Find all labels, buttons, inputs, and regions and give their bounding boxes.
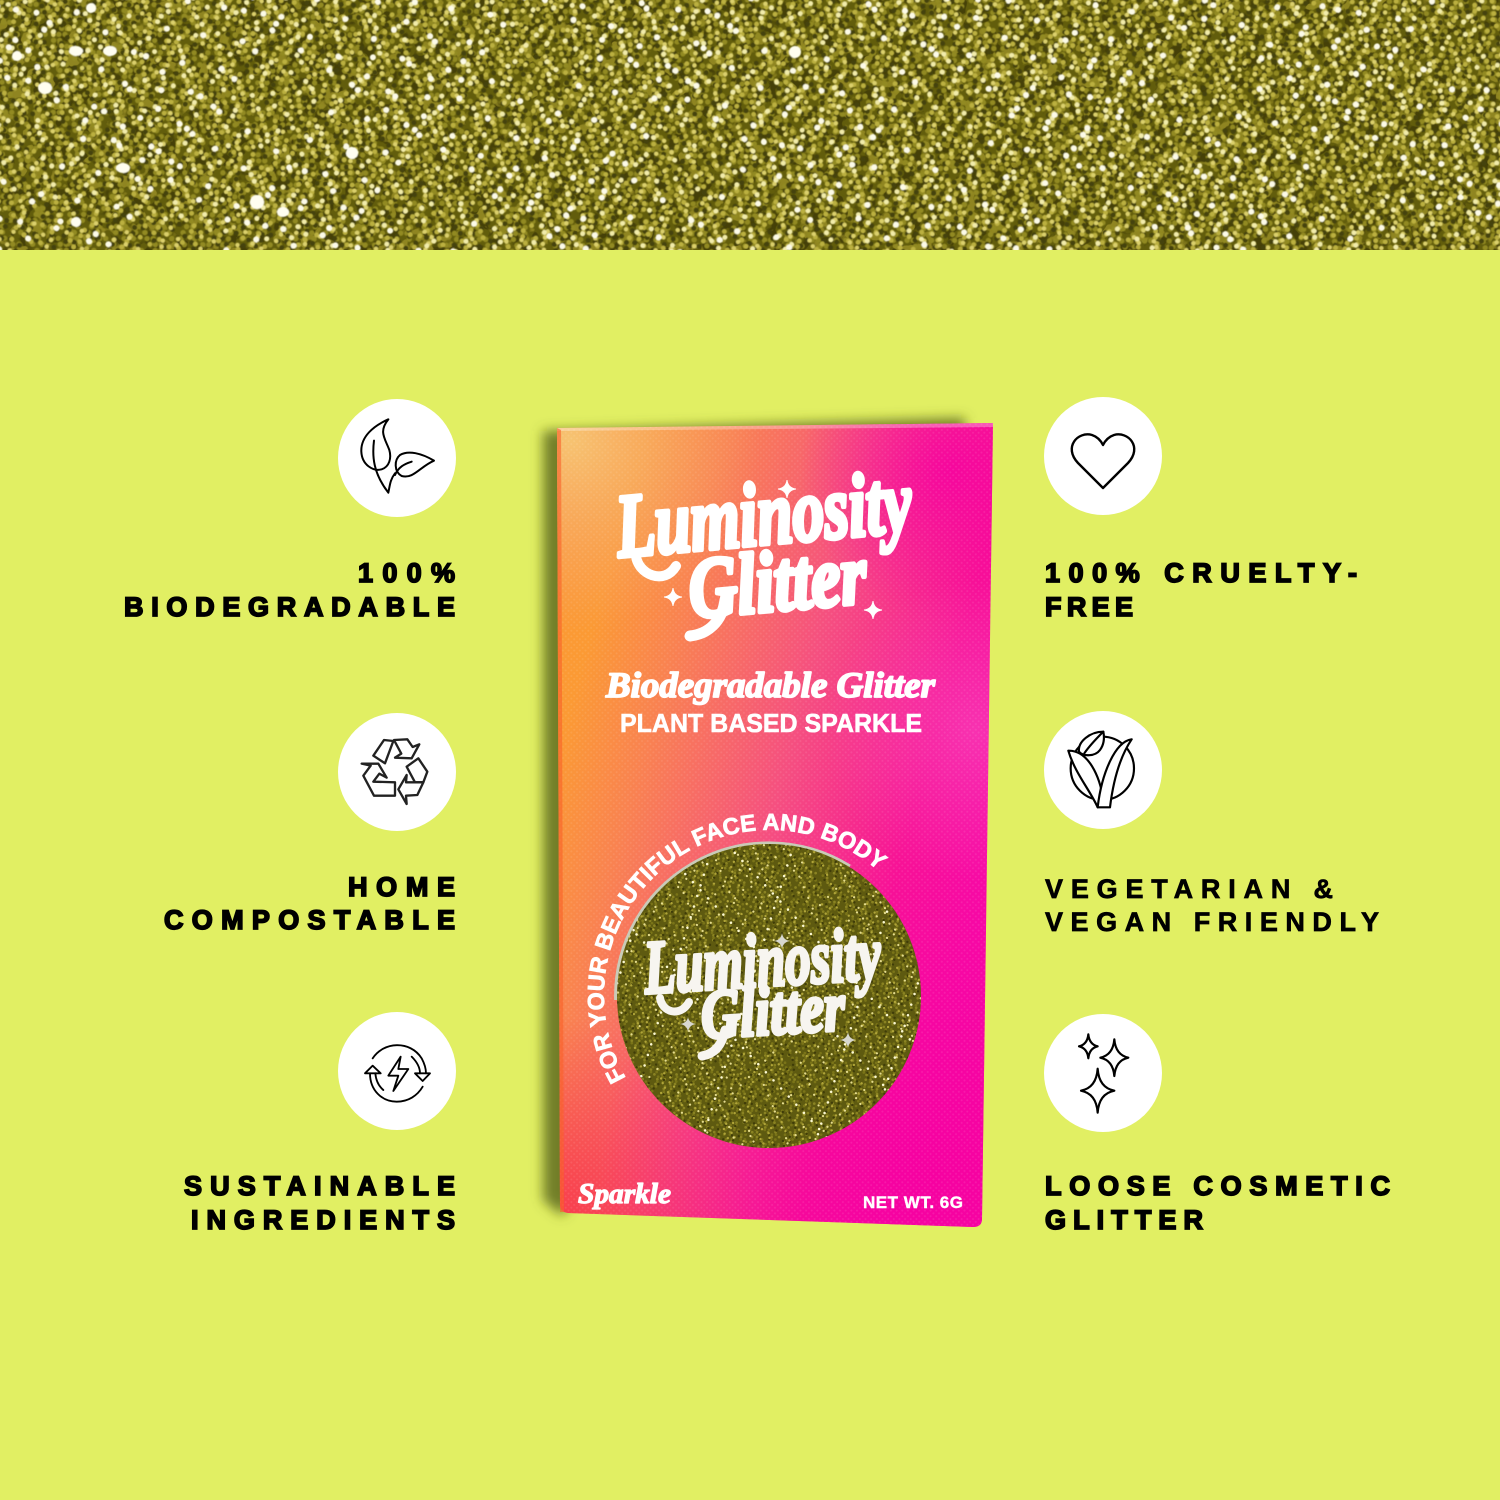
glitter window <box>614 841 921 1148</box>
box logo: Glitter <box>685 525 871 637</box>
sparkle shade name: Sparkle <box>578 1179 671 1210</box>
feature: sustainable ingredients <box>184 1012 456 1235</box>
label: cruelty free: FREE <box>1045 592 1133 622</box>
icon: sparkles <box>1044 1014 1162 1132</box>
label: home compostable: HOME <box>348 872 455 902</box>
label: loose cosmetic glitter <box>1045 1171 1390 1235</box>
label: 100% biodegradable <box>124 558 455 622</box>
label: 100% biodegradable: 100% <box>358 558 455 588</box>
label: vegetarian and vegan friendly: VEGETARIAN & <box>1045 874 1333 904</box>
feature: home compostable <box>164 713 456 935</box>
feature: loose cosmetic glitter <box>1044 1014 1390 1235</box>
feature: cruelty free <box>1044 397 1357 622</box>
box subtitle: plant based sparkle: PLANT BASED SPARKLE <box>620 708 922 738</box>
label: home compostable: COMPOSTABLE <box>164 905 455 935</box>
label: loose cosmetic glitter: GLITTER <box>1045 1205 1203 1235</box>
window logo: Luminosity <box>641 912 883 1010</box>
box logo <box>611 452 916 637</box>
feature: vegetarian and vegan <box>1044 711 1379 937</box>
label: cruelty free <box>1045 558 1357 622</box>
label: vegetarian and vegan friendly <box>1045 874 1379 937</box>
icon: recycle <box>338 713 456 831</box>
box logo: Luminosity <box>611 452 916 577</box>
window logo <box>641 912 883 1056</box>
label: loose cosmetic glitter: LOOSE COSMETIC <box>1045 1171 1390 1201</box>
label: cruelty free: 100% CRUELTY- <box>1045 558 1357 588</box>
curved tagline: FOR YOUR BEAUTIFUL FACE AND BODY <box>587 814 889 1085</box>
box face <box>557 423 993 1227</box>
label: sustainable ingredients <box>184 1171 455 1235</box>
label: home compostable <box>164 872 455 935</box>
feature: biodegradable <box>124 399 456 622</box>
label: 100% biodegradable: BIODEGRADABLE <box>124 592 455 622</box>
box shadow <box>543 418 965 1216</box>
label: sustainable ingredients: SUSTAINABLE <box>184 1171 455 1201</box>
window logo: Glitter <box>699 969 848 1054</box>
icon: heart <box>1044 397 1162 515</box>
product box <box>534 410 993 1227</box>
icon: leaves <box>338 399 456 517</box>
label: vegetarian and vegan friendly: VEGAN FRIENDLY <box>1045 907 1379 937</box>
net weight: NET WT. 6G <box>863 1193 963 1212</box>
label: sustainable ingredients: INGREDIENTS <box>191 1205 455 1235</box>
box subtitle: biodegradable glitter: Biodegradable Glitter <box>605 665 936 705</box>
glitter banner <box>0 0 1500 250</box>
icon: renewable energy <box>338 1012 456 1130</box>
icon: vegan leaves <box>1044 711 1162 829</box>
